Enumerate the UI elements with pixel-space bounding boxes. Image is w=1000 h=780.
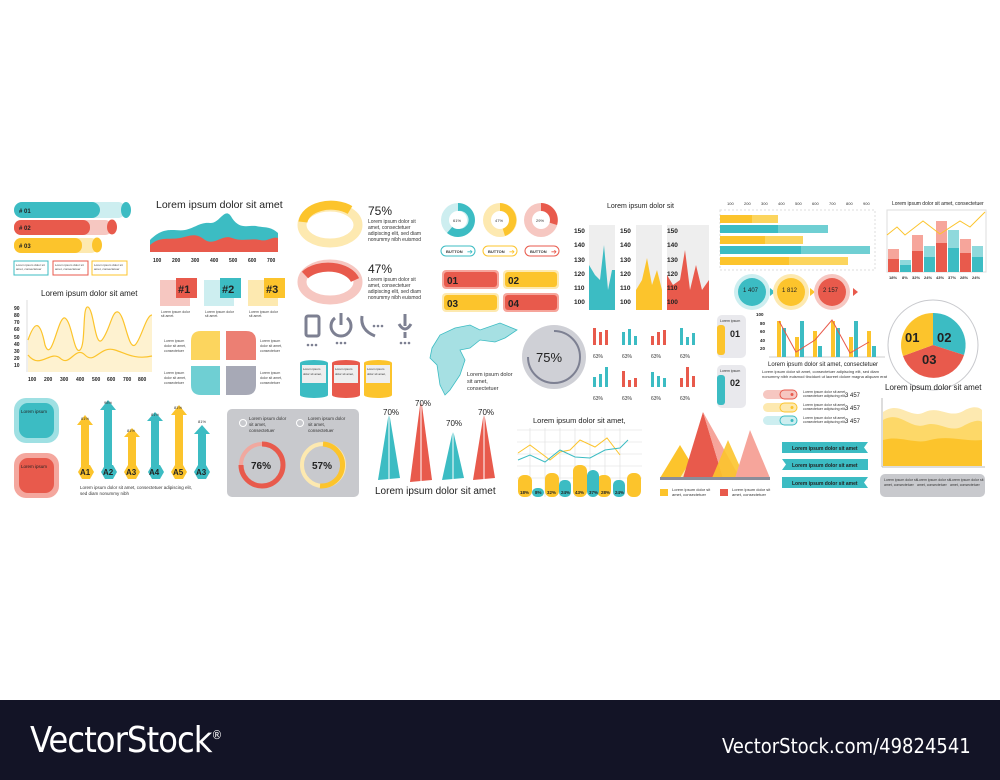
panel: toggles: consectetuer adipiscing elit, xyxy=(803,407,846,411)
panel: step circles: 1 407 xyxy=(743,288,759,294)
panel: stacked bar chart: 32% xyxy=(912,275,920,280)
panel: arrow bar chart: Lorem ipsum dolor sit amet, consectetuer adipiscing elit, xyxy=(80,485,192,490)
panel: horizontal bar chart: 200 xyxy=(744,201,751,206)
panel: yellow line chart: 70 xyxy=(14,320,20,326)
panel: pie donuts and buttons xyxy=(441,203,559,256)
panel: stacked bar chart: 8% xyxy=(902,275,908,280)
panel: pie donuts and buttons: BUTTON xyxy=(488,249,505,254)
panel: toggles: consectetuer adipiscing elit, xyxy=(803,420,846,424)
panel: world map: consectetuer xyxy=(467,386,499,392)
panel: pie donuts and buttons: 29% xyxy=(536,218,544,223)
panel: 3D ring percentages xyxy=(302,204,421,301)
panel: four-tile icons: dolor sit amet, xyxy=(260,376,282,380)
panel: yellow line chart: 800 xyxy=(138,377,147,383)
panel: stacked bar chart: 24% xyxy=(972,275,980,280)
panel: 3D ring percentages: adipiscing elit, sed diam xyxy=(368,289,421,295)
panel: horizontal bar chart: 900 xyxy=(863,201,870,206)
panel: arrow bar chart: A5 xyxy=(173,468,184,477)
footer logo: VectorStock® xyxy=(30,720,221,761)
panel: hashtag boxes: #3 xyxy=(266,284,278,296)
panel: hashtag boxes: sit amet. xyxy=(161,314,174,318)
panel: wave area chart: 100 xyxy=(153,258,162,264)
panel: three area columns: 130 xyxy=(667,257,678,264)
panel: bar and line combo chart: Lorem ipsum dolor sit amet, consectetuer adipiscing elit, sed diam xyxy=(762,369,880,374)
panel: toggles: Lorem ipsum dolor sit amet, xyxy=(803,390,846,394)
panel: yellow line chart: 100 xyxy=(28,377,37,383)
panel: world map: Lorem ipsum dolor xyxy=(467,372,513,378)
panel: bar and line combo chart: 80 xyxy=(760,321,766,326)
panel: stacked bar chart: 43% xyxy=(936,275,944,280)
panel: cone chart xyxy=(375,398,496,497)
panel: arrow bar chart: sed diam nonummy nibh xyxy=(80,491,130,496)
panel: four-tile icons: consectetuer xyxy=(260,381,281,385)
panel: step circles: 2 157 xyxy=(823,288,839,294)
panel: line and bar chart: 8% xyxy=(535,490,542,495)
panel: grey donut panel: consectetuer xyxy=(249,428,275,433)
panel: hashtag boxes: sit amet. xyxy=(205,314,218,318)
panel: mountain chart: Lorem ipsum dolor sit xyxy=(732,487,771,492)
panel: four-tile icons: dolor sit amet, xyxy=(164,376,186,380)
panel: wave area chart xyxy=(150,199,283,264)
panel: grey donut panel: 57% xyxy=(312,461,332,472)
panel: grey donut panel: 76% xyxy=(251,461,271,472)
panel: cylinder bars: Lorem ipsum dolor sit xyxy=(16,263,45,267)
panel: line and bar chart: 32% xyxy=(547,490,556,495)
panel: grey donut panel xyxy=(227,409,359,497)
panel: hashtag boxes: #2 xyxy=(222,284,234,296)
panel: grey donut panel: Lorem ipsum dolor xyxy=(308,416,346,421)
panel: numbered labels: 02 xyxy=(508,276,520,287)
panel: 3D ring percentages: amet, consectetuer xyxy=(368,225,411,231)
panel: three area columns: 100 xyxy=(667,299,678,306)
panel: three area columns: 100 xyxy=(620,299,631,306)
panel: stacked bar chart xyxy=(887,201,986,280)
panel: pie donuts and buttons: 47% xyxy=(495,218,503,223)
panel: grey donut panel: sit amet, xyxy=(308,422,325,427)
panel: cylinders: dolor sit amet, xyxy=(367,372,386,376)
panel: bar and line combo chart: 20 xyxy=(760,346,766,351)
panel: mountain chart xyxy=(660,412,771,497)
panel: yellow line chart: 10 xyxy=(14,363,20,369)
panel: three area columns: 150 xyxy=(620,228,631,235)
panel: arrow bar chart xyxy=(77,245,210,496)
panel: pie chart 01 02 03: 03 xyxy=(922,352,936,367)
panel: 3D ring percentages: nonummy nibh euismod xyxy=(368,295,421,301)
panel: horizontal bar chart: 400 xyxy=(778,201,785,206)
panel: three area columns: 140 xyxy=(574,242,585,249)
panel: layered area chart: Lorem ipsum dolor sit amet xyxy=(885,383,982,392)
panel: mountain chart: amet, consectetuer xyxy=(672,492,707,497)
panel: three area columns: 120 xyxy=(574,271,585,278)
panel: horizontal bar chart: 600 xyxy=(812,201,819,206)
panel: cylinders: dolor sit amet, xyxy=(303,372,322,376)
panel: yellow line chart: 400 xyxy=(76,377,85,383)
panel: line and bar chart: Lorem ipsum dolor sit amet, xyxy=(533,416,626,425)
panel: 75% gauge xyxy=(522,325,586,389)
panel: mountain chart: Lorem ipsum dolor sit xyxy=(672,487,711,492)
panel: three area columns: 130 xyxy=(620,257,631,264)
panel: line and bar chart: 24% xyxy=(561,490,570,495)
panel: cylinder bars xyxy=(14,202,131,275)
footer band xyxy=(0,700,1000,780)
panel: cylinder bars: Lorem ipsum dolor sit xyxy=(55,263,84,267)
panel: ribbons: Lorem ipsum dolor sit amet xyxy=(792,481,858,487)
panel: three area columns xyxy=(574,203,709,310)
panel: wave area chart: 500 xyxy=(229,258,238,264)
panel: yellow line chart: 30 xyxy=(14,349,20,355)
panel: small bar groups: 63% xyxy=(622,354,633,360)
panel: small bar groups: 63% xyxy=(651,396,662,402)
panel: line and bar chart: 43% xyxy=(575,490,584,495)
panel: arrow bar chart: A2 xyxy=(103,468,114,477)
panel: bar and line combo chart: nonummy nibh euismod tincidunt ut laoreet dolore magna aliquam erat xyxy=(762,374,888,379)
panel: small bar groups: 63% xyxy=(593,396,604,402)
panel: yellow line chart: 200 xyxy=(44,377,53,383)
panel: 3D ring percentages: 75% xyxy=(368,204,392,218)
panel: yellow line chart xyxy=(14,289,152,383)
panel: small bar groups: 63% xyxy=(651,354,662,360)
panel: line and bar chart: 18% xyxy=(520,490,529,495)
panel: hashtag boxes xyxy=(160,278,285,318)
panel: yellow line chart: Lorem ipsum dolor sit amet xyxy=(41,289,138,298)
panel: yellow line chart: 50 xyxy=(14,335,20,341)
panel: yellow line chart: 90 xyxy=(14,306,20,312)
panel: arrow bar chart: A3 xyxy=(126,468,137,477)
panel: wave area chart: Lorem ipsum dolor sit amet xyxy=(156,199,283,211)
panel: yellow line chart: 600 xyxy=(107,377,116,383)
panel: bar and line combo chart: Lorem ipsum dolor sit amet, consectetuer xyxy=(768,362,878,368)
panel: bar and line combo chart: 100 xyxy=(756,312,764,317)
panel: four-tile icons: Lorem ipsum xyxy=(164,371,184,375)
panel: stacked bar chart: 37% xyxy=(948,275,956,280)
panel: small bar groups xyxy=(593,328,695,402)
panel: toggles: Lorem ipsum dolor sit amet, xyxy=(803,403,846,407)
panel: wave area chart: 200 xyxy=(172,258,181,264)
panel: horizontal bar chart: 300 xyxy=(761,201,768,206)
panel: world map: sit amet, xyxy=(467,379,488,385)
panel: yellow line chart: 60 xyxy=(14,327,20,333)
panel: layered area chart: amet, consectetuer xyxy=(917,483,948,487)
panel: line and bar chart xyxy=(517,416,642,497)
panel: wave area chart: 700 xyxy=(267,258,276,264)
panel: arrow bar chart: 81% xyxy=(127,428,135,433)
panel: 75% gauge: 75% xyxy=(536,350,562,365)
panel: stacked bar chart: 24% xyxy=(924,275,932,280)
panel: grey donut panel: Lorem ipsum dolor xyxy=(249,416,287,421)
panel: three area columns: 140 xyxy=(620,242,631,249)
panel: bar and line combo chart xyxy=(756,312,888,379)
panel: 3D ring percentages: adipiscing elit, sed diam xyxy=(368,231,421,237)
panel: lorem cards: 01 xyxy=(730,329,740,339)
panel: rounded note squares xyxy=(14,398,59,498)
panel: arrow bar chart: A1 xyxy=(80,468,91,477)
panel: small bar groups: 63% xyxy=(622,396,633,402)
panel: hashtag boxes: Lorem ipsum dolor xyxy=(205,310,235,314)
panel: wave area chart: 600 xyxy=(248,258,257,264)
panel: lorem cards: Lorem ipsum xyxy=(720,319,740,323)
panel: line and bar chart: 37% xyxy=(589,490,598,495)
panel: four-tile icons: consectetuer xyxy=(164,349,185,353)
panel: cylinder bars: Lorem ipsum dolor sit xyxy=(94,263,123,267)
panel: ribbons: Lorem ipsum dolor sit amet xyxy=(792,446,858,452)
panel: pie donuts and buttons: ➔ xyxy=(467,249,473,256)
panel: three area columns: 140 xyxy=(667,242,678,249)
panel: four-tile icons: consectetuer xyxy=(164,381,185,385)
panel: three area columns: 110 xyxy=(620,285,631,292)
panel: three area columns: 130 xyxy=(574,257,585,264)
panel: pie donuts and buttons: BUTTON xyxy=(530,249,547,254)
panel: toggles: consectetuer adipiscing elit, xyxy=(803,394,846,398)
panel: four-tile icons: dolor sit amet, xyxy=(260,344,282,348)
panel: stacked bar chart: 18% xyxy=(889,275,897,280)
panel: three area columns: 150 xyxy=(667,228,678,235)
panel: pie donuts and buttons: BUTTON xyxy=(446,249,463,254)
panel: small bar groups: 63% xyxy=(680,396,691,402)
panel: horizontal bar chart: 700 xyxy=(829,201,836,206)
panel: layered area chart: amet, consectetuer xyxy=(884,483,915,487)
panel: arrow bar chart: 98% xyxy=(104,400,112,405)
panel: numbered labels xyxy=(442,270,559,312)
panel: arrow bar chart: 81% xyxy=(198,419,206,424)
panel: arrow bar chart: 81% xyxy=(174,405,182,410)
panel: horizontal bar chart: 500 xyxy=(795,201,802,206)
panel: cylinder bars: # 01 xyxy=(19,209,31,215)
panel: wave area chart: 300 xyxy=(191,258,200,264)
panel: three area columns: Lorem ipsum dolor sit xyxy=(607,203,674,210)
panel: three area columns: 110 xyxy=(667,285,678,292)
panel: small bar groups: 63% xyxy=(680,354,691,360)
panel: lorem cards: 02 xyxy=(730,378,740,388)
panel: cone chart: 70% xyxy=(383,408,399,417)
panel: three area columns: 120 xyxy=(667,271,678,278)
panel: yellow line chart: 80 xyxy=(14,313,20,319)
panel: layered area chart: Lorem ipsum dolor sit xyxy=(917,478,950,482)
panel: arrow bar chart: 81% xyxy=(81,416,89,421)
panel: three area columns: 110 xyxy=(574,285,585,292)
panel: layered area chart xyxy=(880,383,985,497)
panel: horizontal bar chart: 800 xyxy=(846,201,853,206)
panel: cone chart: 70% xyxy=(478,408,494,417)
panel: stacked bar chart: Lorem ipsum dolor sit amet, consectetuer xyxy=(892,201,984,207)
panel: lorem cards: Lorem ipsum xyxy=(720,369,740,373)
panel: cylinders: Lorem ipsum xyxy=(367,367,385,371)
panel: toggles: 3 457 xyxy=(845,393,861,399)
panel: four-tile icons: Lorem ipsum xyxy=(164,339,184,343)
panel: arrow bar chart: 81% xyxy=(151,412,159,417)
panel: four-tile icons: consectetuer xyxy=(260,349,281,353)
panel: bar and line combo chart: 60 xyxy=(760,329,766,334)
panel: arrow bar chart: A3 xyxy=(196,468,207,477)
panel: numbered labels: 03 xyxy=(447,299,459,310)
panel: three area columns: 100 xyxy=(574,299,585,306)
panel: cone chart: 70% xyxy=(415,399,431,408)
panel: pie chart 01 02 03: 02 xyxy=(937,330,951,345)
panel: cylinder bars: amet, consectetuer xyxy=(94,267,120,271)
panel: line and bar chart: 28% xyxy=(601,490,610,495)
panel: hashtag boxes: #1 xyxy=(178,284,190,296)
panel: hashtag boxes: sit amet. xyxy=(249,314,262,318)
panel: toggles: Lorem ipsum dolor sit amet, xyxy=(803,416,846,420)
panel: yellow line chart: 700 xyxy=(123,377,132,383)
panel: cylinder bars: # 02 xyxy=(19,226,31,232)
panel: yellow line chart: 500 xyxy=(92,377,101,383)
panel: grey donut panel: sit amet, xyxy=(249,422,266,427)
panel: toggles: 3 457 xyxy=(845,406,861,412)
panel: pie chart 01 02 03 xyxy=(888,300,978,390)
panel: cylinders: dolor sit amet, xyxy=(335,372,354,376)
panel: layered area chart: amet, consectetuer xyxy=(950,483,981,487)
panel: yellow line chart: 40 xyxy=(14,342,20,348)
panel: pie donuts and buttons: ➔ xyxy=(551,249,557,256)
panel: yellow line chart: 300 xyxy=(60,377,69,383)
panel: 3D ring percentages: nonummy nibh euismod xyxy=(368,237,421,243)
panel: small bar groups: 63% xyxy=(593,354,604,360)
panel: lorem cards xyxy=(717,315,746,408)
panel: pie chart 01 02 03: 01 xyxy=(905,330,919,345)
panel: grey donut panel: consectetuer xyxy=(308,428,334,433)
panel: rounded note squares: Lorem ipsum xyxy=(21,409,47,414)
panel: horizontal bar chart: 100 xyxy=(727,201,734,206)
panel: three area columns: 120 xyxy=(620,271,631,278)
panel: numbered labels: 01 xyxy=(447,276,459,287)
panel: line and bar chart: 24% xyxy=(615,490,624,495)
panel: hashtag boxes: Lorem ipsum dolor xyxy=(161,310,191,314)
panel: layered area chart: Lorem ipsum dolor sit xyxy=(950,478,983,482)
panel: layered area chart: Lorem ipsum dolor sit xyxy=(884,478,917,482)
panel: cylinders: Lorem ipsum xyxy=(303,367,321,371)
panel: step circles xyxy=(734,274,858,310)
panel: four-tile icons xyxy=(164,331,282,395)
panel: toggles: 3 457 xyxy=(845,419,861,425)
panel: arrow bar chart: A4 xyxy=(149,468,160,477)
panel: three area columns: 150 xyxy=(574,228,585,235)
panel: hashtag boxes: Lorem ipsum dolor xyxy=(249,310,279,314)
panel: stacked bar chart: 28% xyxy=(960,275,968,280)
panel: step circles: 1 812 xyxy=(782,288,798,294)
panel: horizontal bar chart xyxy=(720,201,875,270)
panel: cone chart: 70% xyxy=(446,419,462,428)
panel: four-tile icons: Lorem ipsum xyxy=(260,371,280,375)
panel: ribbons xyxy=(782,442,868,488)
panel: cylinders: Lorem ipsum xyxy=(335,367,353,371)
panel: numbered labels: 04 xyxy=(508,299,520,310)
panel: 3D ring percentages: Lorem ipsum dolor sit xyxy=(368,219,416,225)
panel: four-tile icons: dolor sit amet, xyxy=(164,344,186,348)
panel: pie donuts and buttons: ➔ xyxy=(509,249,515,256)
panel: toggles xyxy=(763,390,861,425)
panel: four-tile icons: Lorem ipsum xyxy=(260,339,280,343)
panel: 3D ring percentages: amet, consectetuer xyxy=(368,283,411,289)
panel: mountain chart: amet, consectetuer xyxy=(732,492,767,497)
panel: rounded note squares: Lorem ipsum xyxy=(21,464,47,469)
panel: cone chart: Lorem ipsum dolor sit amet xyxy=(375,486,496,497)
panel: 3D ring percentages: 47% xyxy=(368,262,392,276)
panel: cylinder bars: amet, consectetuer xyxy=(55,267,81,271)
panel: cylinder bars: amet, consectetuer xyxy=(16,267,42,271)
footer url: VectorStock.com/49824541 xyxy=(722,734,971,758)
panel: ribbons: Lorem ipsum dolor sit amet xyxy=(792,463,858,469)
panel: cylinder bars: # 03 xyxy=(19,244,31,250)
panel: bar and line combo chart: 40 xyxy=(760,338,766,343)
panel: 3D ring percentages: Lorem ipsum dolor sit xyxy=(368,277,416,283)
panel: world map xyxy=(430,323,517,395)
panel: cylinders xyxy=(300,360,392,398)
panel: pie donuts and buttons: 61% xyxy=(453,218,461,223)
panel: wave area chart: 400 xyxy=(210,258,219,264)
panel: yellow line chart: 20 xyxy=(14,356,20,362)
icons: phone, power, call, mic xyxy=(306,313,411,346)
